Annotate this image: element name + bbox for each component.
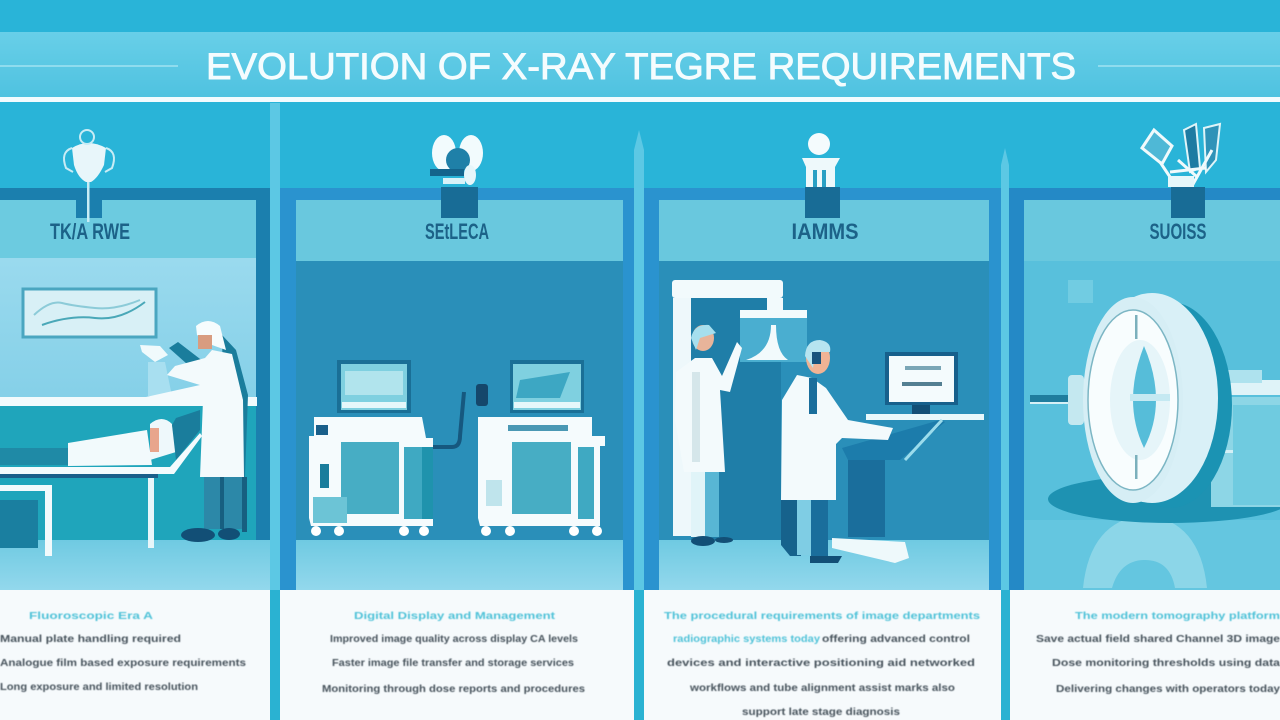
panel: era 2 (280, 135, 636, 590)
body: text 1: Analogue film based exposure requirements (0, 657, 246, 669)
body: text 2: Improved image quality across display CA levels (330, 633, 578, 645)
panel: text 4 (1010, 590, 1280, 720)
panel: text 2 (280, 590, 634, 720)
body: text 3 (667, 633, 975, 718)
body: text 3: devices and interactive positioning aid networked (667, 657, 975, 669)
body: text 2 (322, 633, 585, 695)
doctor at console (781, 340, 893, 563)
title banner (0, 32, 1280, 102)
panel: era 1 (0, 130, 270, 590)
body: text 4: Delivering changes with operators today (1056, 683, 1280, 695)
heading: text 3: The procedural requirements of image departments (664, 610, 980, 622)
body: text 3: offering advanced control (822, 633, 970, 645)
label: era 1: TK/A RWE (50, 219, 130, 244)
panel: era 3 (644, 133, 1001, 590)
label: era 4: SUOISS (1150, 219, 1206, 244)
body: text 4: Save actual field shared Channel 3D image (1036, 633, 1280, 645)
computer console (832, 352, 984, 563)
scanner gantry (1083, 293, 1232, 508)
cable and plug (433, 384, 488, 447)
body: text 3: support late stage diagnosis (742, 706, 900, 718)
patient on table (0, 410, 202, 556)
body: text 2: Faster image file transfer and storage services (332, 657, 574, 669)
doctor (140, 321, 248, 542)
heading: text 2: Digital Display and Management (354, 610, 556, 622)
title: EVOLUTION OF X-RAY TEGRE REQUIREMENTS (206, 45, 1076, 87)
body: text 1: Manual plate handling required (0, 633, 181, 645)
body: text 4: Dose monitoring thresholds using data (1052, 657, 1280, 669)
icon: hand with tools (1142, 124, 1220, 218)
separator 2 (634, 590, 644, 720)
body: text 2: Monitoring through dose reports and procedures (322, 683, 585, 695)
heading: text 4: The modern tomography platform (1075, 610, 1280, 622)
body: text 4 (1036, 633, 1280, 695)
label: era 3: IAMMS (792, 219, 858, 244)
x-ray arm (672, 280, 807, 540)
machine right (478, 360, 605, 536)
machine left (309, 360, 433, 536)
body: text 1 (0, 633, 246, 693)
panel: text 3 (644, 590, 1001, 720)
rod (1030, 375, 1090, 425)
technician (675, 325, 742, 546)
label: era 2: SEtLECA (425, 219, 489, 244)
panel: text 1 (0, 590, 270, 720)
panel: era 4 (1009, 124, 1280, 590)
divider: era 1-2 (270, 103, 280, 590)
icon: vase (64, 130, 114, 222)
divider: era 2-3 (634, 130, 644, 590)
wall picture (23, 289, 156, 337)
body: text 1: Long exposure and limited resolution (0, 681, 198, 693)
body: text 3: workflows and tube alignment assist marks also (689, 682, 955, 694)
divider: era 3-4 (1001, 148, 1009, 590)
scanner table (1211, 370, 1280, 507)
icon: figure (802, 133, 840, 218)
wall tile (1068, 280, 1093, 303)
separator 3 (1001, 590, 1010, 720)
scanner shadow (1048, 475, 1280, 523)
body: text 3: radiographic systems today (673, 633, 820, 645)
separator 1 (270, 590, 280, 720)
scanner reflection (1083, 515, 1207, 588)
icon: lungs (430, 135, 483, 218)
heading: text 1: Fluoroscopic Era A (29, 610, 154, 622)
counter (0, 397, 257, 406)
